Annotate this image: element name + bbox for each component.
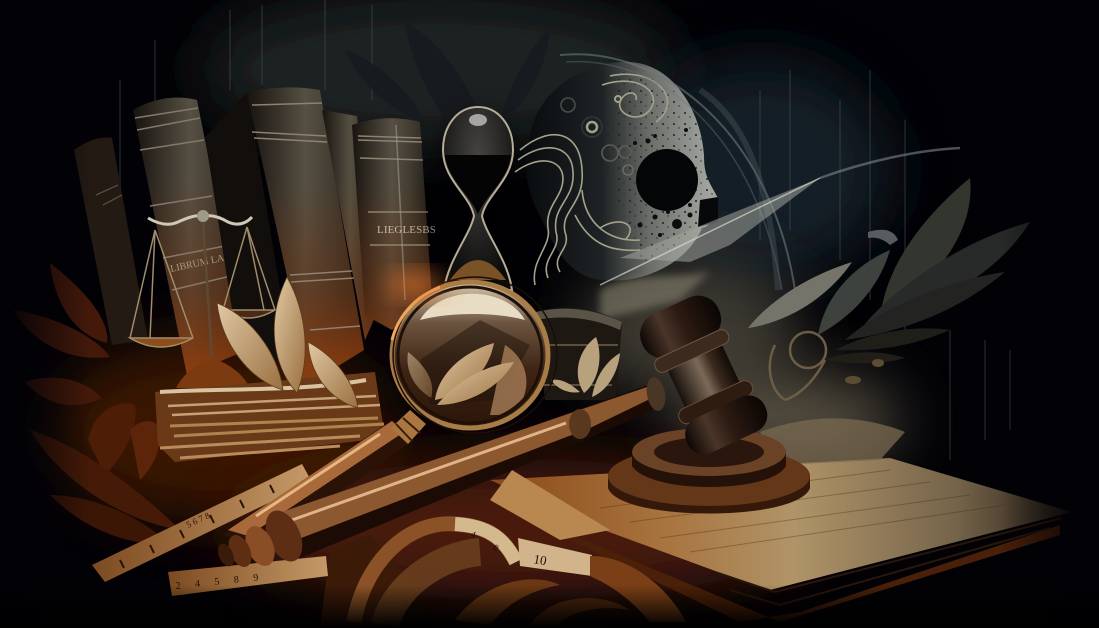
feathers: right [748,178,1030,364]
book title: right: LIEGLESBS [377,224,436,236]
tape: left diagonal [92,464,312,582]
book title: left: LIBRUM LA [169,253,226,275]
tape: lower horizontal [168,556,328,596]
gavel handle [215,376,668,571]
magnifying glass [222,277,557,545]
leaves in lens [407,343,514,405]
leaves: background left [13,263,180,545]
magnifier lens [392,282,548,428]
leaves: light foreground [217,277,358,408]
ornament: small emblem [770,230,898,400]
book: far left [74,138,148,345]
measuring tapes [92,464,686,628]
gavel [215,288,773,571]
tape: curved: 4 [469,529,478,540]
book: narrow volume [322,110,378,340]
book: central thick volume [205,87,364,392]
brown debris [320,535,420,628]
book: tall left volume [133,98,247,375]
large document [470,418,1072,622]
leaves at small book [551,337,620,397]
icon: scales of justice [130,210,275,388]
book: right volume [352,118,436,330]
paper stack: left [155,372,385,462]
small book behind gavel [535,308,622,400]
tape: curl right [455,538,686,628]
tape: lower horizontal: 2 4 5 8 9 [175,572,265,592]
skull eye socket [636,149,698,211]
scale pan: right [223,227,275,318]
tape: curl right: 10 [532,551,548,568]
skull pores [633,128,692,237]
sweeping arcs and quill [560,54,960,320]
glow at magnifier edge [387,273,443,297]
hourglass [428,107,528,290]
skull swirls [515,74,667,285]
gavel head [632,288,773,460]
tape: curved: 8 [491,542,501,553]
skull nose [698,197,718,227]
scale pan: left [130,230,193,347]
sound block [608,428,810,514]
skull [515,62,718,285]
tape: curved [354,524,516,625]
tape: left diagonal: 5 6 7 8 [185,510,212,530]
background leaves [345,20,550,150]
magnifier handle [222,410,426,545]
